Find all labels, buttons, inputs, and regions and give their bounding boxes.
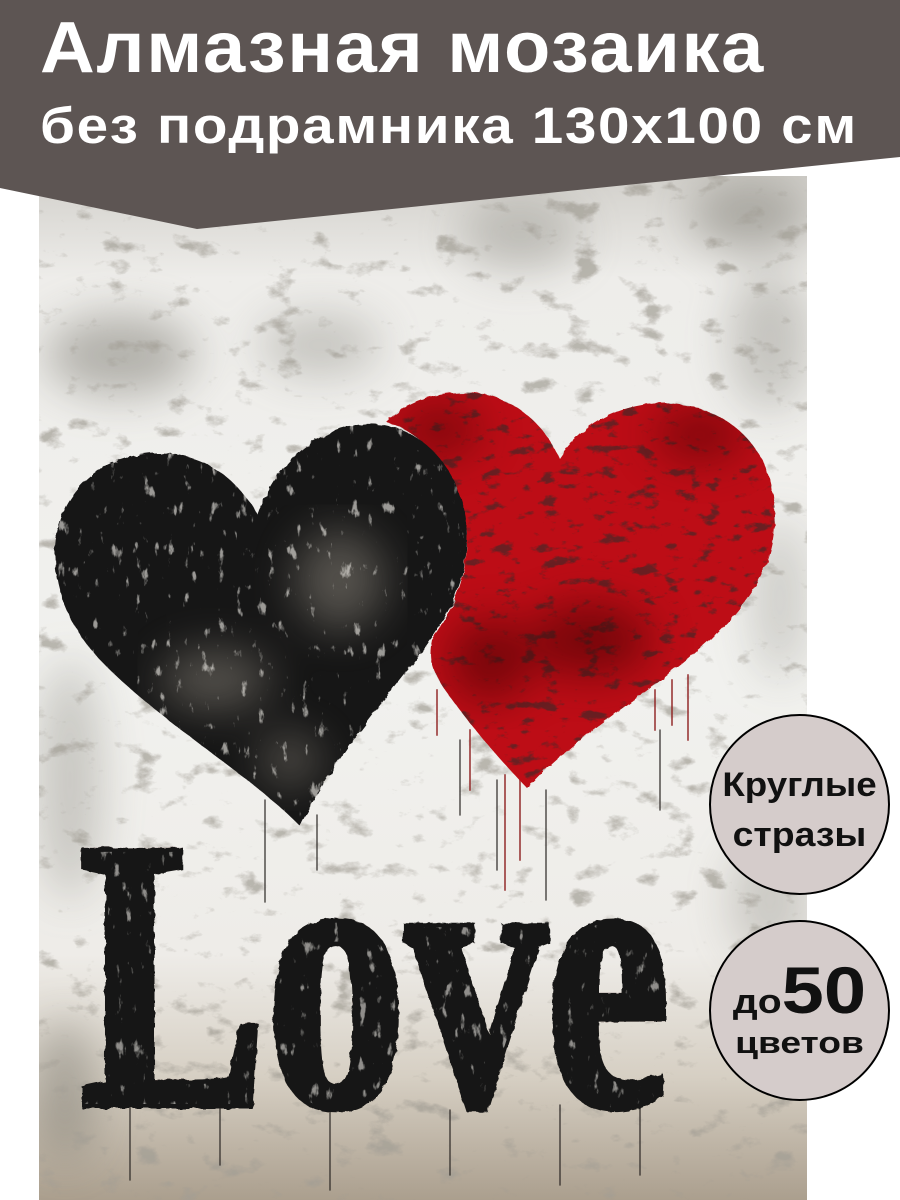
title: Алмазная мозаика xyxy=(40,8,765,88)
title xyxy=(40,8,858,154)
header banner xyxy=(0,0,900,229)
black heart xyxy=(55,424,467,826)
red heart xyxy=(386,393,775,788)
Love lettering xyxy=(80,846,668,1113)
badge: up to 50 colors: до50 xyxy=(733,953,866,1027)
badge: round rhinestones: Круглые xyxy=(722,766,877,804)
badge: up to 50 colors: цветов xyxy=(735,1025,864,1060)
canvas background xyxy=(35,176,810,1200)
paint drips xyxy=(130,675,688,1190)
subtitle: без подрамника 130х100 см xyxy=(40,97,858,154)
painting: hearts and Love on distressed canvas xyxy=(39,176,807,1200)
badge: round rhinestones: стразы xyxy=(733,816,866,854)
badge: up to 50 colors xyxy=(709,920,890,1101)
badge: round rhinestones xyxy=(709,714,890,895)
